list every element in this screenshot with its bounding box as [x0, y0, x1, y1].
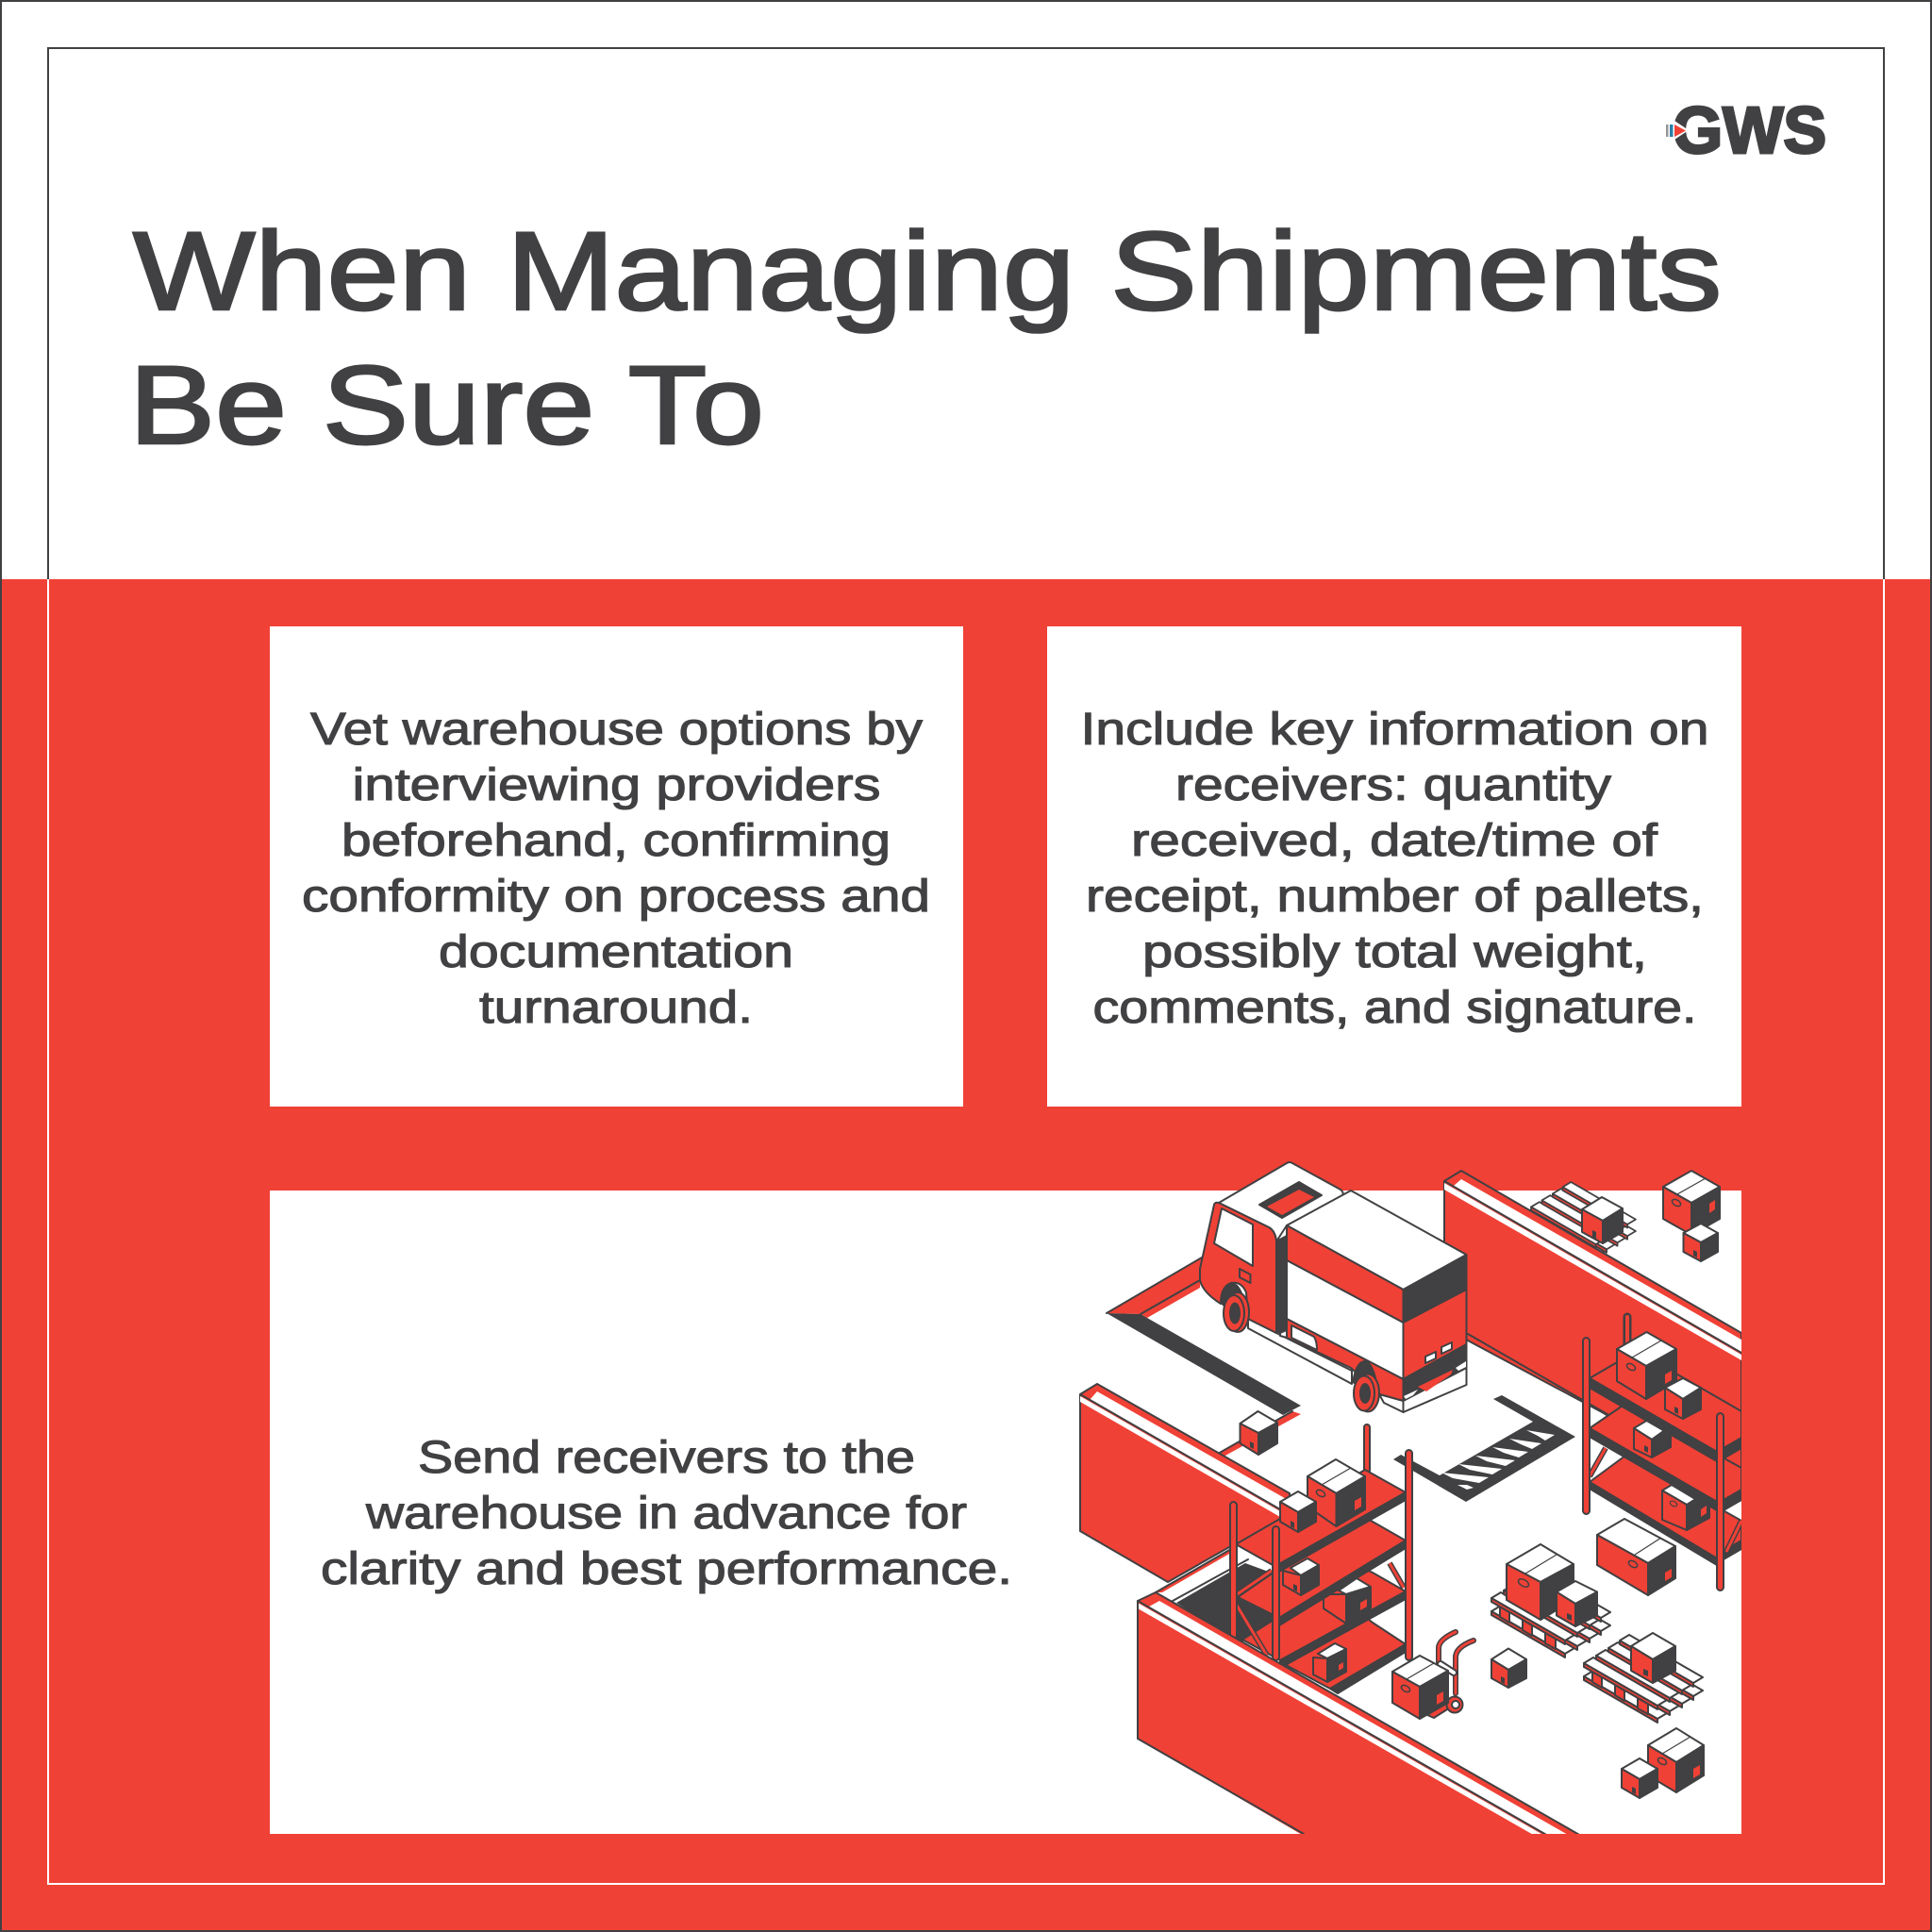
hatched floor marking	[1393, 1395, 1575, 1502]
panel: send receivers: clarity and best performance.	[321, 1544, 1012, 1594]
box by hand truck	[1392, 1656, 1448, 1719]
posts	[1583, 1338, 1590, 1514]
boxes on top shelf	[1617, 1332, 1676, 1366]
posts	[1230, 1502, 1237, 1639]
sunroof	[1259, 1182, 1322, 1218]
panel: vet warehouse options: turnaround.	[479, 983, 753, 1033]
chassis	[1248, 1319, 1352, 1384]
cab side	[1200, 1203, 1276, 1333]
right brace	[1390, 1563, 1404, 1588]
panel: include key information: receivers: quantity	[1175, 760, 1611, 810]
left braces	[1266, 1568, 1272, 1574]
panel: send receivers	[270, 1191, 1741, 1834]
panel: vet warehouse options: interviewing providers	[353, 760, 881, 810]
stacked boxes top right	[1663, 1171, 1720, 1261]
middle shelf	[1238, 1514, 1406, 1618]
front wheel	[1221, 1283, 1242, 1307]
third shelf	[1590, 1456, 1741, 1558]
panel: include key information	[1047, 626, 1741, 1107]
logo: GWS: GWS	[1673, 93, 1826, 167]
loose small box	[1491, 1649, 1526, 1688]
back wall	[1444, 1171, 1741, 1498]
title	[129, 209, 1722, 468]
panel: include key information: receipt, number of pallets,	[1086, 872, 1704, 922]
back post	[1364, 1424, 1370, 1474]
box on third shelf	[1661, 1485, 1694, 1504]
illustration: isometric warehouse	[1080, 1162, 1741, 1870]
back pallet with box	[1531, 1182, 1636, 1259]
top shelf	[1591, 1362, 1740, 1451]
left back wall	[1080, 1384, 1290, 1582]
left shelving unit	[1230, 1424, 1412, 1693]
title: When Managing Shipments	[133, 209, 1722, 334]
panel: vet warehouse options: documentation	[439, 927, 793, 977]
panel: vet warehouse options	[270, 626, 963, 1107]
loading bay floor marking	[1107, 1257, 1301, 1457]
box on fourth shelf	[1318, 1643, 1346, 1658]
title: Be Sure To	[129, 343, 764, 468]
long flat box	[1597, 1519, 1675, 1595]
hand truck	[1427, 1632, 1474, 1718]
top shelf	[1236, 1470, 1406, 1565]
braces	[1590, 1448, 1606, 1476]
box on second shelf	[1633, 1421, 1662, 1439]
boxes bottom right	[1622, 1728, 1704, 1798]
second shelf	[1590, 1404, 1741, 1509]
fourth shelf	[1286, 1615, 1406, 1689]
pallet with one box	[1584, 1633, 1703, 1723]
rear wheel	[1353, 1360, 1377, 1385]
panel: send receivers: Send receivers to the	[418, 1433, 915, 1483]
box on middle shelf	[1291, 1558, 1319, 1575]
truck	[1200, 1162, 1466, 1412]
right shelving unit	[1583, 1317, 1741, 1591]
cargo box	[1287, 1191, 1466, 1290]
panel: vet warehouse options: beforehand, confirming	[341, 816, 891, 866]
panel: include key information: comments, and signature.	[1092, 983, 1696, 1033]
front wall	[1137, 1591, 1579, 1834]
box on third shelf	[1339, 1578, 1371, 1594]
third shelf	[1242, 1566, 1406, 1660]
cab roof	[1219, 1162, 1343, 1241]
panel: vet warehouse options: Vet warehouse options by	[310, 705, 923, 755]
return wall and shaded interior	[1156, 1549, 1274, 1641]
box on loading path	[1240, 1411, 1277, 1455]
pallet with two boxes	[1491, 1544, 1610, 1657]
panel: include key information: received, date/time of	[1131, 816, 1658, 866]
panel: include key information: Include key information on	[1081, 705, 1709, 755]
panel: vet warehouse options: conformity on process and	[302, 872, 930, 922]
boxes on top shelf	[1307, 1459, 1365, 1493]
panel: include key information: possibly total weight,	[1142, 927, 1647, 977]
panel: send receivers: warehouse in advance for	[365, 1489, 967, 1539]
